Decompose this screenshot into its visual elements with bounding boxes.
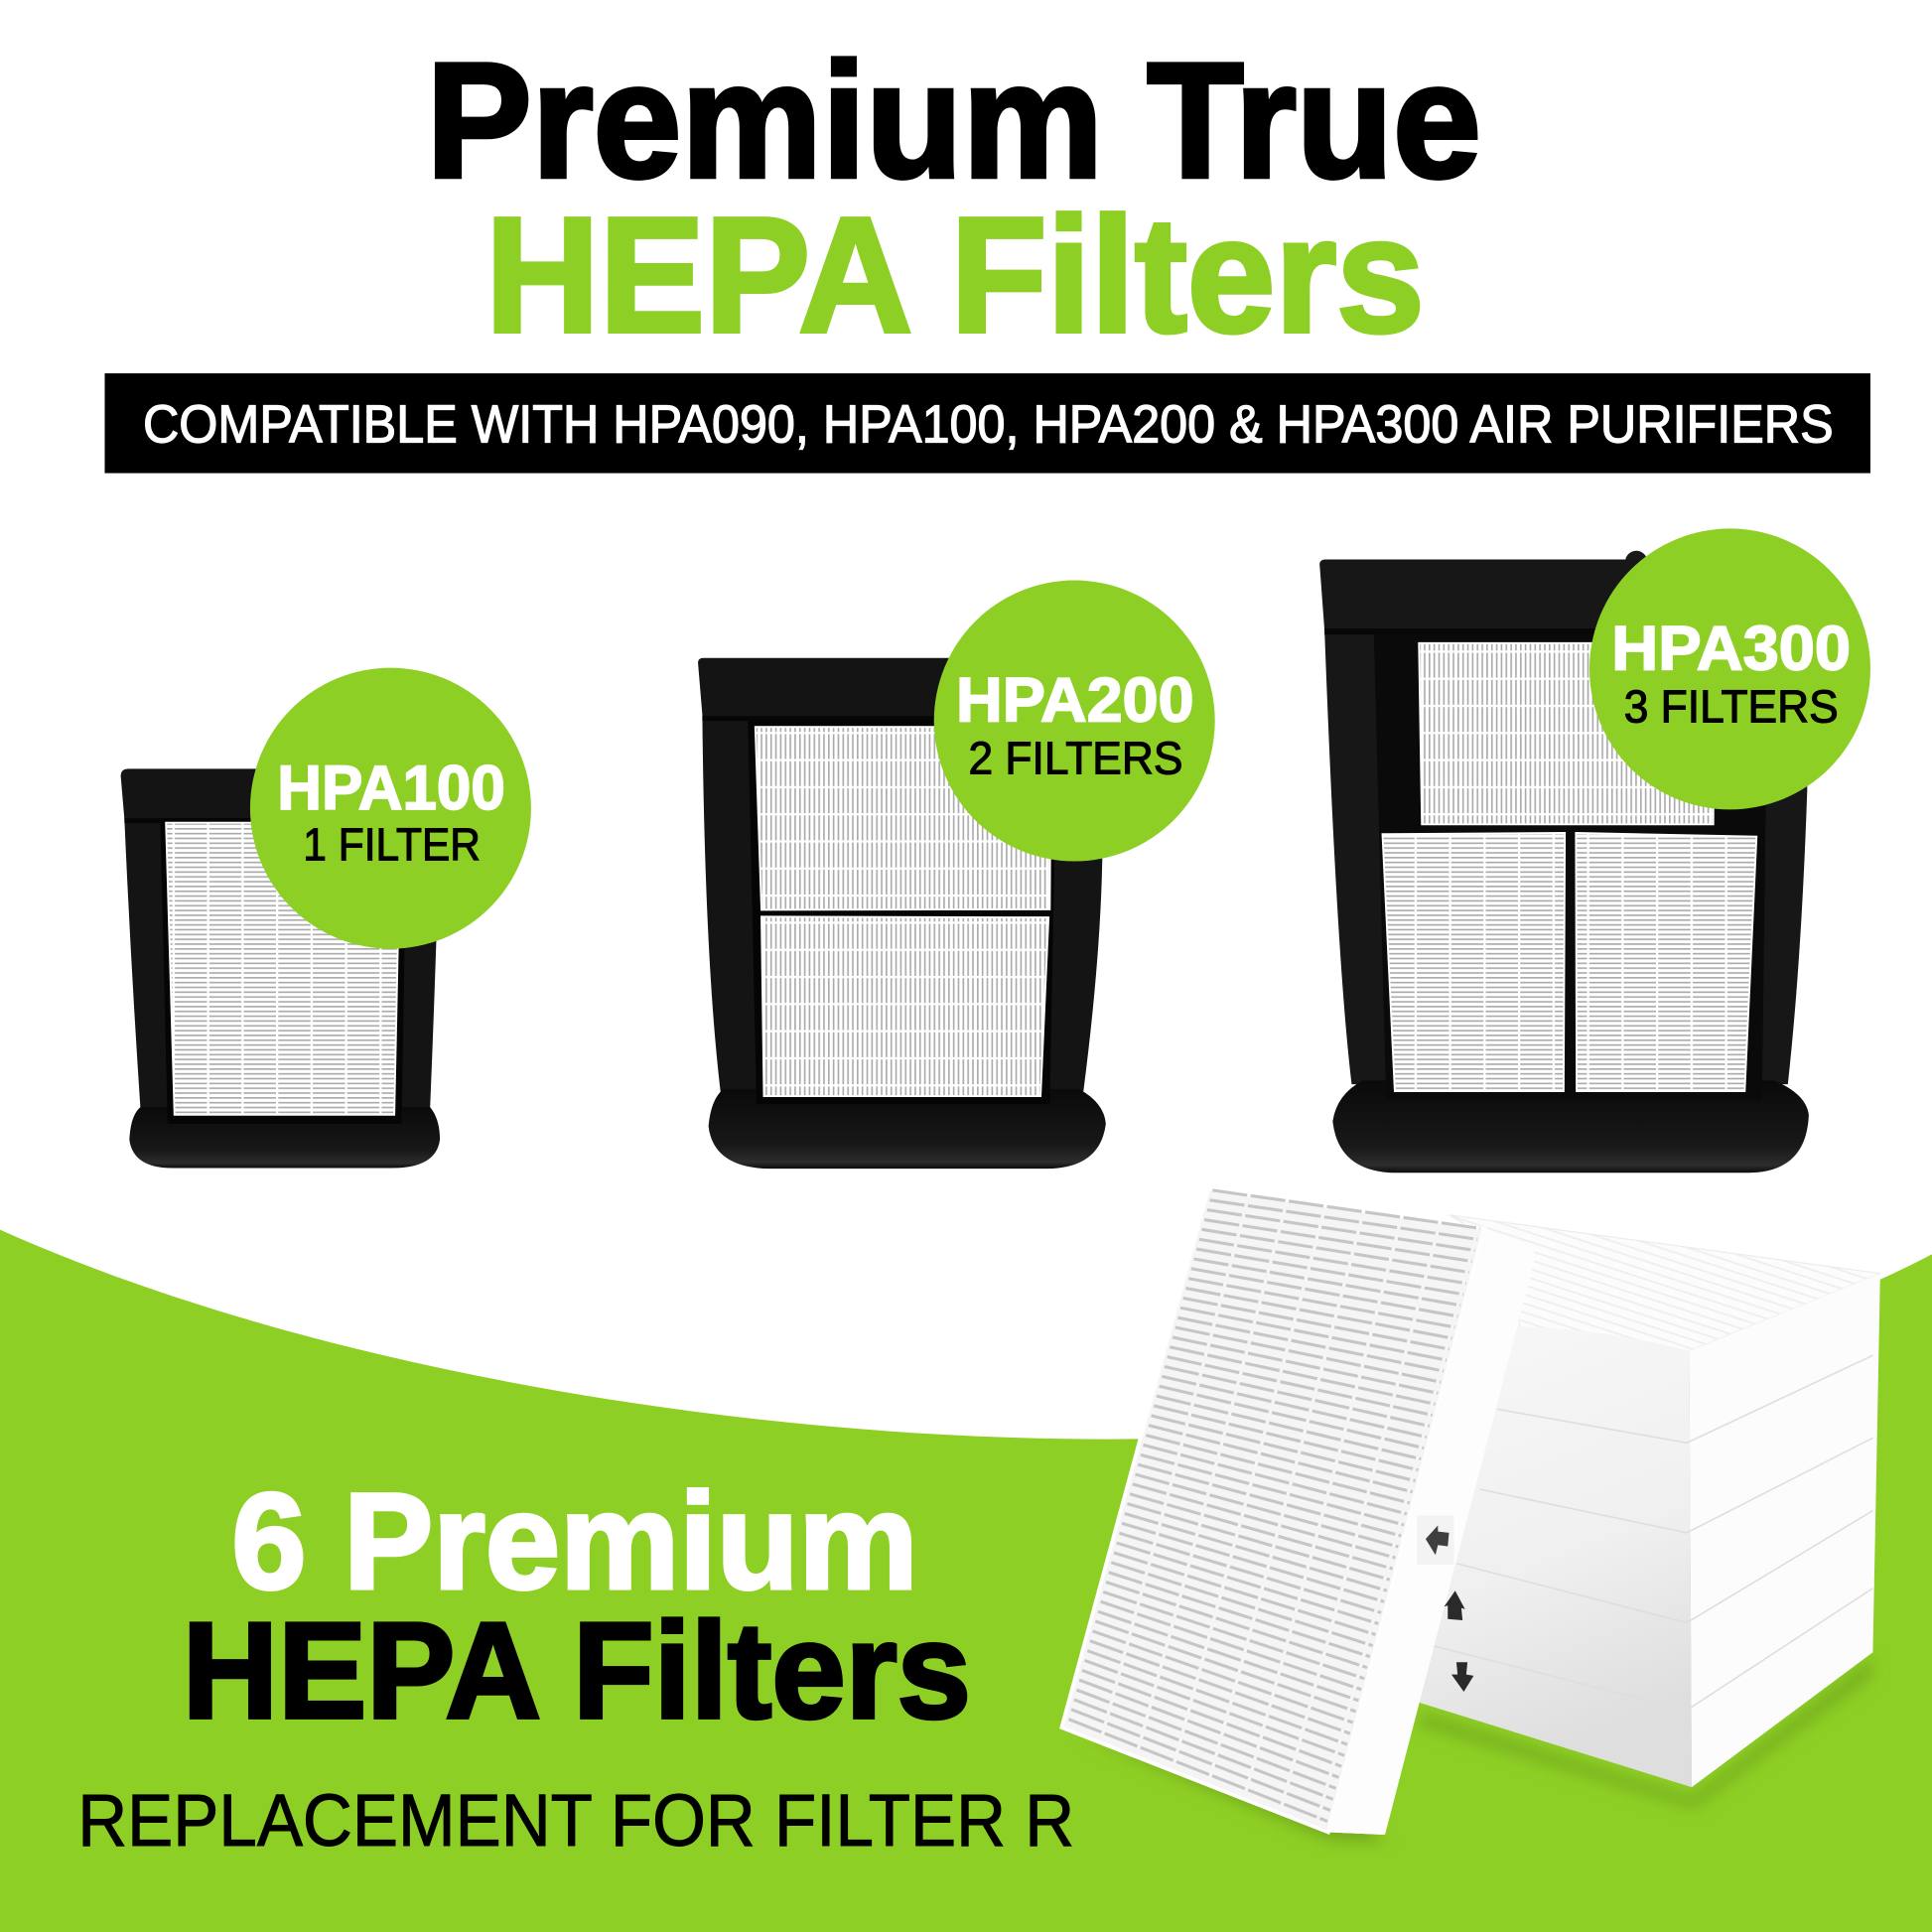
badge: HPA100: 1 FILTER [303, 818, 481, 870]
badge: HPA200 [934, 581, 1215, 862]
heading: 6 Premium HEPA Filters [183, 1465, 971, 1747]
heading: 6 Premium HEPA Filters: HEPA Filters [183, 1594, 971, 1747]
badge: HPA100: HPA100 [277, 754, 505, 823]
title line: Premium True: Premium True [426, 29, 1481, 211]
arrow label: up arrow [1445, 1590, 1465, 1620]
compatibility banner: COMPATIBLE WITH HPA090, HPA100, HPA200 & HPA300 AIR PURIFIERS [143, 396, 1834, 455]
green wave background [0, 1230, 1932, 1932]
title line: HEPA Filters: HEPA Filters [485, 184, 1425, 366]
arrow label: down arrow [1451, 1662, 1473, 1692]
leaning filter pleats [1069, 1190, 1480, 1821]
badge: HPA300: HPA300 [1611, 615, 1851, 684]
stack right face [1690, 1274, 1880, 1787]
badge: HPA200: 2 FILTERS [968, 732, 1182, 783]
purifier: HPA200 [698, 658, 1106, 1169]
badge: HPA300 [1589, 528, 1870, 809]
leaning filter frame [1061, 1189, 1535, 1835]
badge: HPA200: HPA200 [956, 666, 1194, 736]
leaning filter side [1328, 1228, 1535, 1835]
stack left face [1392, 1318, 1692, 1787]
heading: 6 Premium HEPA Filters: 6 Premium [231, 1465, 918, 1618]
title [426, 29, 1481, 366]
purifier: HPA300 [1319, 551, 1809, 1173]
compatibility banner [104, 373, 1870, 474]
badge: HPA100 [250, 668, 531, 949]
stack top face [1449, 1215, 1880, 1351]
purifier: HPA100 [121, 768, 441, 1169]
subheading: replacement: REPLACEMENT FOR FILTER R [77, 1779, 1074, 1862]
leaning filter face [1061, 1189, 1484, 1832]
badge: HPA300: 3 FILTERS [1624, 680, 1839, 732]
arrow label: side left arrow [1417, 1516, 1453, 1565]
filter stack [1061, 1189, 1880, 1844]
